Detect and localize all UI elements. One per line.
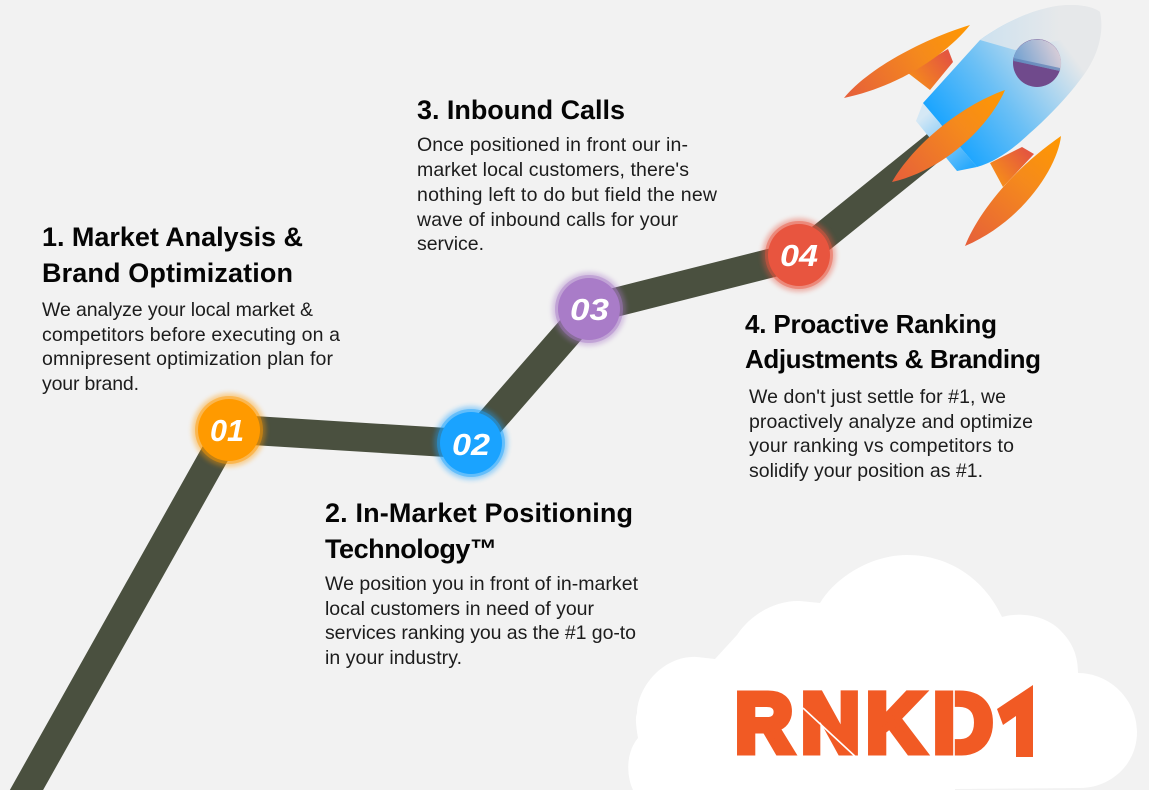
marker 03: 03 — [570, 292, 609, 327]
marker 04: 04 — [780, 238, 818, 273]
step 1 text — [42, 222, 340, 395]
growth path line — [22, 122, 965, 790]
step 4 description: proactively analyze and optimize — [749, 411, 1033, 433]
centre fin — [892, 90, 1005, 182]
step 4 description: We don't just settle for #1, we — [749, 386, 1006, 408]
step 3 description: market local customers, there's — [417, 159, 689, 181]
step 1 heading — [42, 222, 303, 288]
RNKD1 logo: N — [801, 676, 860, 770]
step 3 description — [416, 134, 718, 255]
step 2 description: in your industry. — [325, 647, 462, 669]
step 3 text — [416, 95, 718, 255]
marker 01: 01 — [210, 413, 244, 448]
step 2 text — [325, 498, 639, 669]
step 4 heading — [745, 309, 1041, 374]
step 2 description: We position you in front of in-market — [325, 573, 639, 595]
lower fin — [965, 136, 1061, 246]
step 1 heading: 1. Market Analysis & — [42, 222, 303, 252]
step 3 heading: 3. Inbound Calls — [417, 95, 625, 125]
step 2 description — [325, 573, 639, 669]
step 2 heading: Technology™ — [325, 534, 497, 564]
rear fin base — [908, 49, 953, 90]
RNKD1 logo: R — [735, 676, 793, 770]
rocket nose cap — [980, 5, 1100, 50]
step 3 description: service. — [417, 233, 484, 255]
step 3 description: nothing left to do but field the new — [417, 184, 718, 206]
rocket window — [1013, 39, 1061, 87]
step 3 description: Once positioned in front our in- — [417, 134, 688, 156]
lower fin base — [990, 147, 1034, 187]
RNKD1 logo: 1 — [998, 676, 1034, 770]
step 4 description: solidify your position as #1. — [749, 460, 983, 482]
step 3 description: wave of inbound calls for your — [416, 209, 678, 231]
cloud background — [628, 555, 1137, 790]
step 4 text — [745, 309, 1041, 482]
step 1 description — [42, 299, 340, 395]
step 1 description: competitors before executing on a — [42, 324, 340, 346]
step 2 description: local customers in need of your — [325, 598, 594, 620]
step 1 description: your brand. — [42, 373, 139, 395]
step 1 description: omnipresent optimization plan for — [42, 348, 334, 370]
step 2 heading: 2. In-Market Positioning — [325, 498, 633, 528]
step 2 description: services ranking you as the #1 go-to — [325, 622, 636, 644]
marker 01 — [192, 393, 266, 467]
rocket body — [923, 5, 1101, 167]
marker 02 — [434, 406, 508, 480]
step 2 heading — [325, 498, 633, 564]
RNKD1 logo: K — [866, 676, 924, 770]
marker 04 — [762, 218, 836, 292]
step 4 description — [749, 386, 1033, 482]
rocket nozzle — [916, 103, 977, 171]
RNKD1 logo — [737, 685, 1033, 757]
step 4 description: your ranking vs competitors to — [749, 435, 1014, 457]
step 1 description: We analyze your local market & — [42, 299, 313, 321]
RNKD1 logo: D — [933, 676, 993, 770]
step 4 heading: 4. Proactive Ranking — [745, 309, 997, 339]
marker 03 — [552, 272, 626, 346]
upper fin — [844, 25, 970, 98]
rocket — [844, 5, 1101, 246]
step 4 heading: Adjustments & Branding — [745, 344, 1041, 374]
marker 02: 02 — [452, 427, 490, 462]
step 1 heading: Brand Optimization — [42, 258, 293, 288]
